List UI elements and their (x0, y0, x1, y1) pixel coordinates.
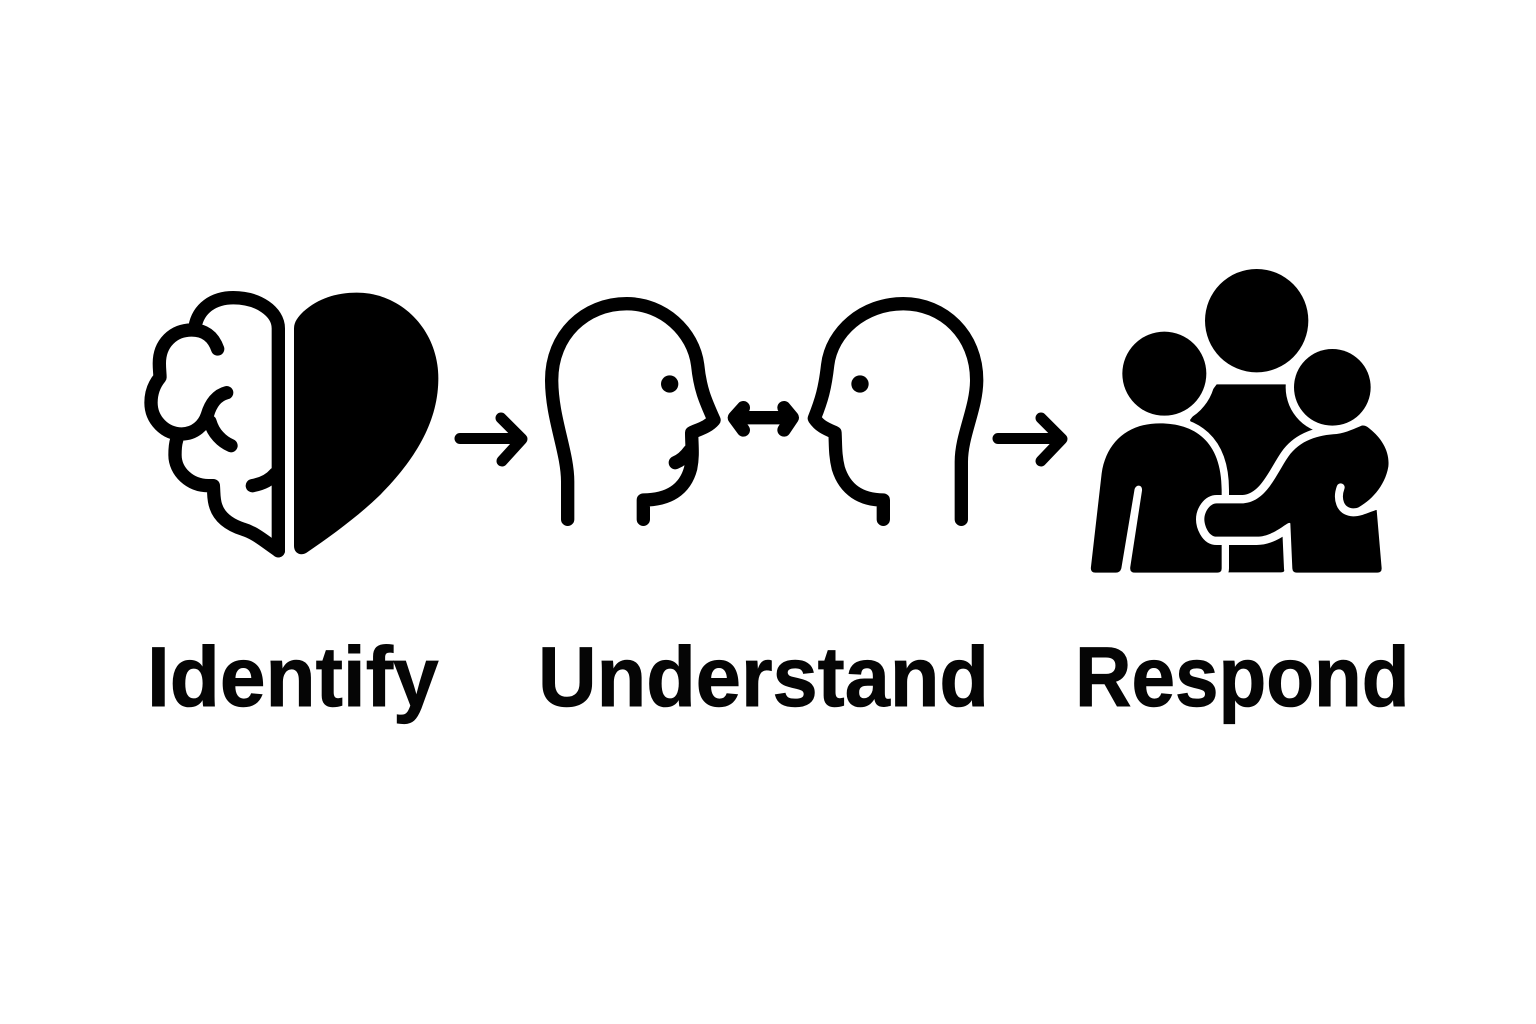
label: Understand: Understand (538, 630, 989, 725)
gap ring around right head (1286, 341, 1379, 434)
right figure arm gap (1339, 487, 1378, 512)
left eye (661, 375, 678, 393)
arrow: understand to respond (998, 418, 1062, 461)
left figure body (1091, 423, 1222, 573)
right figure body with arm (1204, 426, 1389, 573)
arrow: identify to understand (460, 418, 522, 461)
icon: family embrace (1091, 269, 1389, 573)
top head (1205, 269, 1308, 372)
label: Identify: Identify (147, 630, 439, 725)
gap ring around left head (1113, 322, 1216, 425)
left head (552, 304, 714, 519)
label: Respond: Respond (1075, 630, 1410, 725)
right head (1294, 349, 1371, 426)
icon: two heads in conversation (552, 304, 977, 519)
icon: brain and heart (151, 293, 438, 554)
right head (814, 304, 977, 519)
heart half (294, 293, 438, 554)
brain half outline (151, 298, 278, 551)
right eye (851, 375, 869, 393)
centre figure body (1190, 384, 1320, 572)
left head (1122, 332, 1206, 416)
double arrow (734, 408, 792, 430)
